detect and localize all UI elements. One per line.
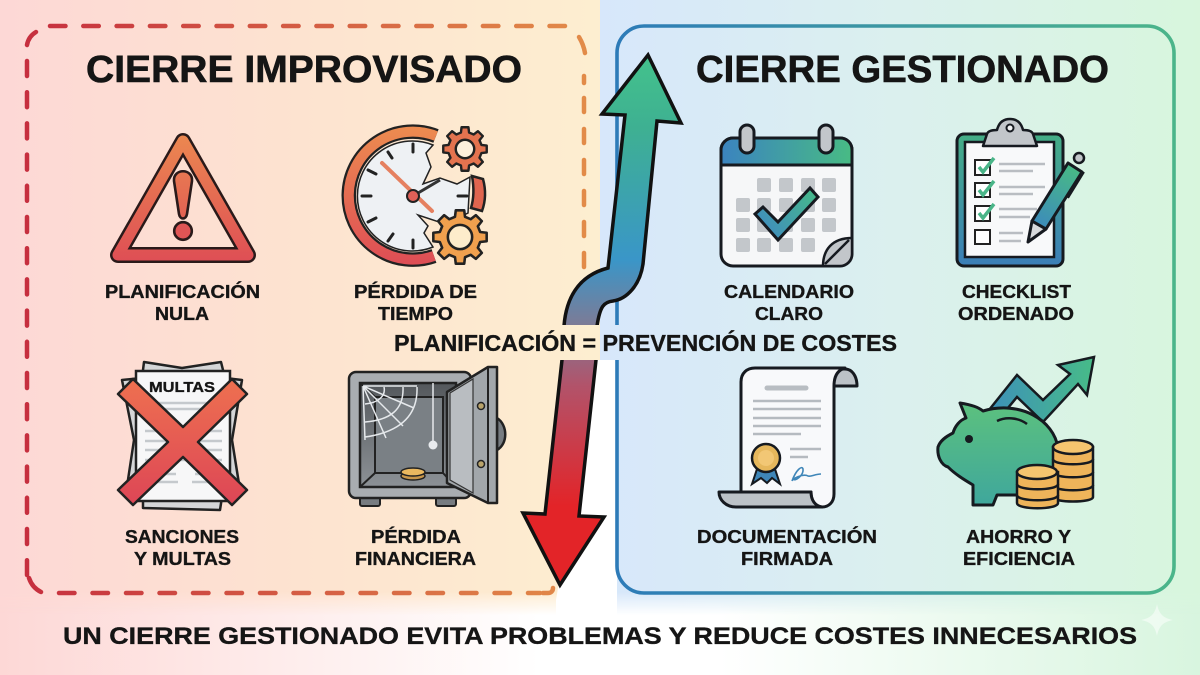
label: pérdida financiera: FINANCIERA — [355, 549, 476, 569]
label: sanciones y multas: Y MULTAS — [134, 549, 231, 569]
text: multas: MULTAS — [149, 379, 215, 396]
label: documentación firmada: DOCUMENTACIÓN — [697, 526, 877, 547]
label: ahorro y eficiencia: AHORRO Y — [966, 527, 1071, 547]
label: planificación nula — [105, 281, 260, 324]
icon: broken clock with gears — [349, 127, 487, 264]
heading: cierre gestionado: CIERRE GESTIONADO — [696, 49, 1109, 91]
icon: calendar with check — [721, 125, 852, 266]
band: central message: PLANIFICACIÓN = PREVENCIÓN DE COSTES — [394, 329, 897, 356]
arrow: rising green and falling red — [523, 55, 681, 585]
label: documentación firmada — [697, 526, 877, 569]
icon: watermark star — [1141, 604, 1173, 636]
label: pérdida de tiempo: TIEMPO — [378, 304, 453, 324]
label: pérdida de tiempo — [354, 281, 477, 324]
label: ahorro y eficiencia: EFICIENCIA — [963, 549, 1075, 569]
label: calendario claro: CLARO — [755, 304, 823, 324]
panel: cierre improvisado border — [27, 26, 585, 593]
label: sanciones y multas: SANCIONES — [125, 527, 239, 547]
label: sanciones y multas — [125, 527, 239, 569]
panel: cierre gestionado border — [617, 26, 1174, 593]
icon: piggy bank, growth arrow and coins — [938, 357, 1094, 508]
icon: empty safe with cobweb — [349, 367, 505, 506]
heading: cierre improvisado: CIERRE IMPROVISADO — [86, 49, 522, 91]
label: ahorro y eficiencia — [963, 527, 1075, 569]
label: checklist ordenado — [958, 282, 1074, 324]
label: pérdida financiera — [355, 526, 476, 569]
label: planificación nula: NULA — [155, 304, 209, 324]
icon: signed document scroll — [719, 368, 857, 507]
label: planificación nula: PLANIFICACIÓN — [105, 281, 260, 302]
label: checklist ordenado: ORDENADO — [958, 304, 1074, 324]
conclusion text: UN CIERRE GESTIONADO EVITA PROBLEMAS Y REDUCE COSTES INNECESARIOS — [63, 623, 1137, 650]
label: calendario claro: CALENDARIO — [724, 282, 854, 302]
icon: crossed-out fines papers — [118, 362, 247, 510]
label: documentación firmada: FIRMADA — [741, 549, 833, 569]
icon: warning triangle — [118, 141, 248, 255]
label: pérdida de tiempo: PÉRDIDA DE — [354, 281, 477, 302]
icon: clipboard checklist with pen — [957, 119, 1084, 266]
label: pérdida financiera: PÉRDIDA — [371, 526, 461, 547]
label: calendario claro — [724, 282, 854, 324]
label: checklist ordenado: CHECKLIST — [962, 282, 1071, 302]
